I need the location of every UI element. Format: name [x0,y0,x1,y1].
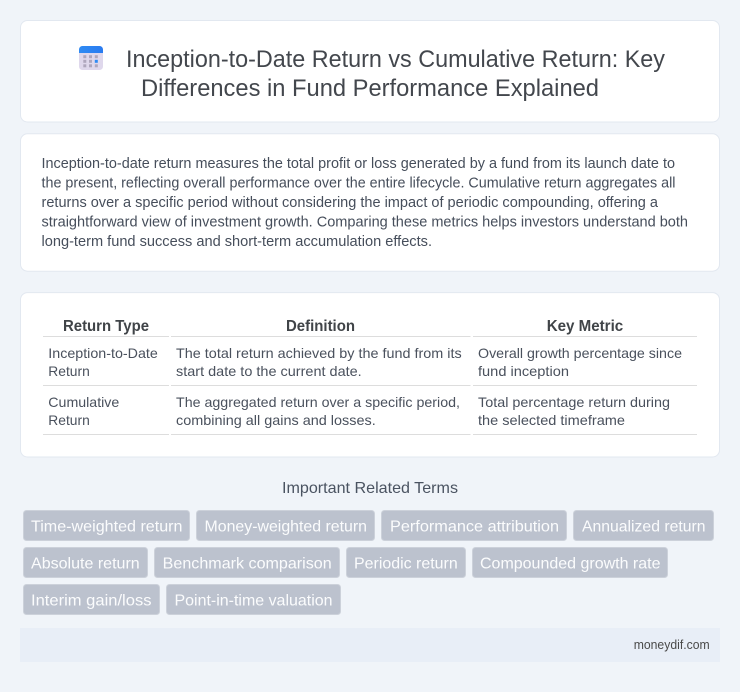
tag [196,510,374,540]
text block: summary [42,156,688,250]
table row: inception-to-date return: Overall growth percentage since [478,345,682,361]
table row: cumulative return: Return [48,412,90,428]
table header row: Return Type [63,318,149,335]
title [126,46,665,102]
tag: Performance attribution [390,518,559,536]
tag [24,548,148,578]
table row: inception-to-date return [48,345,682,379]
tag [166,584,340,614]
table header row [63,318,623,335]
tag [24,584,160,614]
title: Differences in Fund Performance Explained [141,75,599,102]
tag [154,548,340,578]
text block: summary: straightforward view of investment growth. Comparing these metrics helps investors understand both [42,215,688,231]
table row: cumulative return: combining all gains and losses. [176,412,376,428]
table row: inception-to-date return: Return [48,363,90,379]
tag: Time-weighted return [31,518,182,536]
tag [24,510,190,540]
table header row: Definition [286,318,355,335]
tag: Point-in-time valuation [174,592,332,610]
table row: cumulative return [48,394,670,428]
tag: Interim gain/loss [31,592,152,610]
table row: inception-to-date return: Inception-to-Date [48,345,158,361]
tag: Periodic return [354,556,458,572]
heading: important related terms: Important Related Terms [282,480,458,497]
text block: summary: returns over a specific period without considering the impact of periodic compounding, offering a [42,195,658,211]
title: Inception-to-Date Return vs Cumulative Return: Key [126,46,665,73]
table row: cumulative return: Total percentage return during [478,394,670,410]
panel: header [20,20,720,122]
table row: inception-to-date return: start date to the current date. [176,363,362,379]
table row: cumulative return: The aggregated return over a specific period, [176,394,460,410]
table header row: Key Metric [547,318,623,335]
panel: summary paragraph [20,134,720,271]
tag: Annualized return [582,518,706,536]
tag: Money-weighted return [204,518,367,536]
text block: summary: long-term fund success and short-term accumulation effects. [42,234,432,250]
tag [574,510,714,540]
tag [382,510,566,540]
text block: summary: the present, reflecting overall performance over the entire lifecycle. Cumulative return aggregates all [42,176,676,192]
panel: comparison table [20,293,720,457]
table row: cumulative return: the selected timeframe [478,412,625,428]
tag [472,548,668,578]
tag: Benchmark comparison [163,556,332,572]
footer bar [20,628,720,662]
footer bar: moneydif.com [634,638,710,652]
text block: summary: Inception-to-date return measures the total profit or loss generated by a fund from its launch date to [42,156,675,172]
tag list: related terms [24,510,714,614]
tag [346,548,466,578]
table row: inception-to-date return: fund inception [478,363,569,379]
icon: calendar [79,46,103,70]
table row: cumulative return: Cumulative [48,394,120,410]
tag: Compounded growth rate [480,556,661,572]
table row: inception-to-date return: The total return achieved by the fund from its [176,345,462,361]
tag: Absolute return [31,556,140,572]
